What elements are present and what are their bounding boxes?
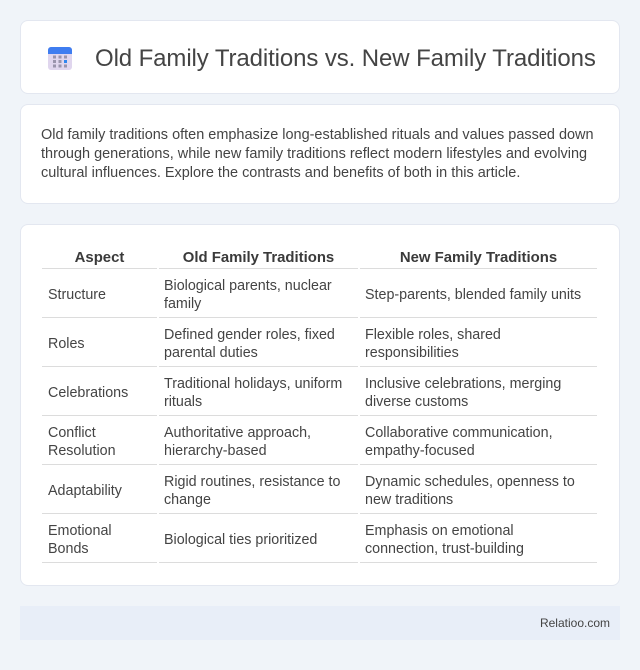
text block: introduction: Old family traditions often emphasize long-established rituals and values passed down (41, 127, 594, 143)
row: Emotional Bonds: connection, trust-building (365, 541, 524, 557)
row: Roles (42, 327, 597, 367)
row: Celebrations (42, 376, 597, 416)
row: Adaptability: Adaptability (48, 483, 122, 499)
row: Adaptability: new traditions (365, 492, 453, 508)
row: Structure: Structure (48, 287, 106, 303)
row: Adaptability: change (164, 492, 211, 508)
text block: introduction: cultural influences. Explore the contrasts and benefits of both in this article. (41, 165, 520, 181)
row: Celebrations: Celebrations (48, 385, 128, 401)
row: Adaptability (42, 474, 597, 514)
row: Emotional Bonds: Emphasis on emotional (365, 523, 514, 539)
table header row: Old Family Traditions (183, 250, 334, 266)
row: Roles: Flexible roles, shared (365, 327, 501, 343)
row: Celebrations: rituals (164, 394, 202, 410)
row: Conflict Resolution: hierarchy-based (164, 443, 267, 459)
row: Structure: Biological parents, nuclear (164, 278, 332, 294)
row: Emotional Bonds: Bonds (48, 541, 89, 557)
row: Structure: Step-parents, blended family units (365, 287, 581, 303)
row: Emotional Bonds: Biological ties prioritized (164, 532, 317, 548)
row: Roles: parental duties (164, 345, 258, 361)
row: Emotional Bonds (42, 523, 597, 563)
text block: introduction (41, 127, 594, 181)
row: Conflict Resolution: Resolution (48, 443, 116, 459)
row: Celebrations: diverse customs (365, 394, 468, 410)
row: Roles: responsibilities (365, 345, 459, 361)
footer credit: Relatioo.com (540, 616, 610, 630)
row: Structure: family (164, 296, 201, 312)
title: Old Family Traditions vs. New Family Traditions (95, 45, 596, 72)
row: Structure (42, 278, 597, 318)
row: Adaptability: Rigid routines, resistance to (164, 474, 340, 490)
icon: calendar (48, 47, 72, 70)
row: Conflict Resolution: empathy-focused (365, 443, 475, 459)
text block: introduction: through generations, while new family traditions reflect modern lifestyles and evolving (41, 146, 587, 162)
row: Roles: Defined gender roles, fixed (164, 327, 335, 343)
table header row: New Family Traditions (400, 250, 557, 266)
row: Conflict Resolution: Authoritative approach, (164, 425, 311, 441)
table header row (42, 250, 597, 269)
row: Roles: Roles (48, 336, 85, 352)
comparison table (42, 250, 597, 563)
row: Celebrations: Inclusive celebrations, merging (365, 376, 561, 392)
table header row: Aspect (75, 250, 124, 266)
panel: comparison table (20, 224, 620, 586)
row: Conflict Resolution: Collaborative communication, (365, 425, 553, 441)
row: Adaptability: Dynamic schedules, openness to (365, 474, 575, 490)
row: Celebrations: Traditional holidays, uniform (164, 376, 342, 392)
panel: title card (20, 20, 620, 94)
row: Emotional Bonds: Emotional (48, 523, 112, 539)
panel: introduction (20, 104, 620, 204)
panel: footer (20, 606, 620, 640)
row: Conflict Resolution (42, 425, 597, 465)
row: Conflict Resolution: Conflict (48, 425, 96, 441)
